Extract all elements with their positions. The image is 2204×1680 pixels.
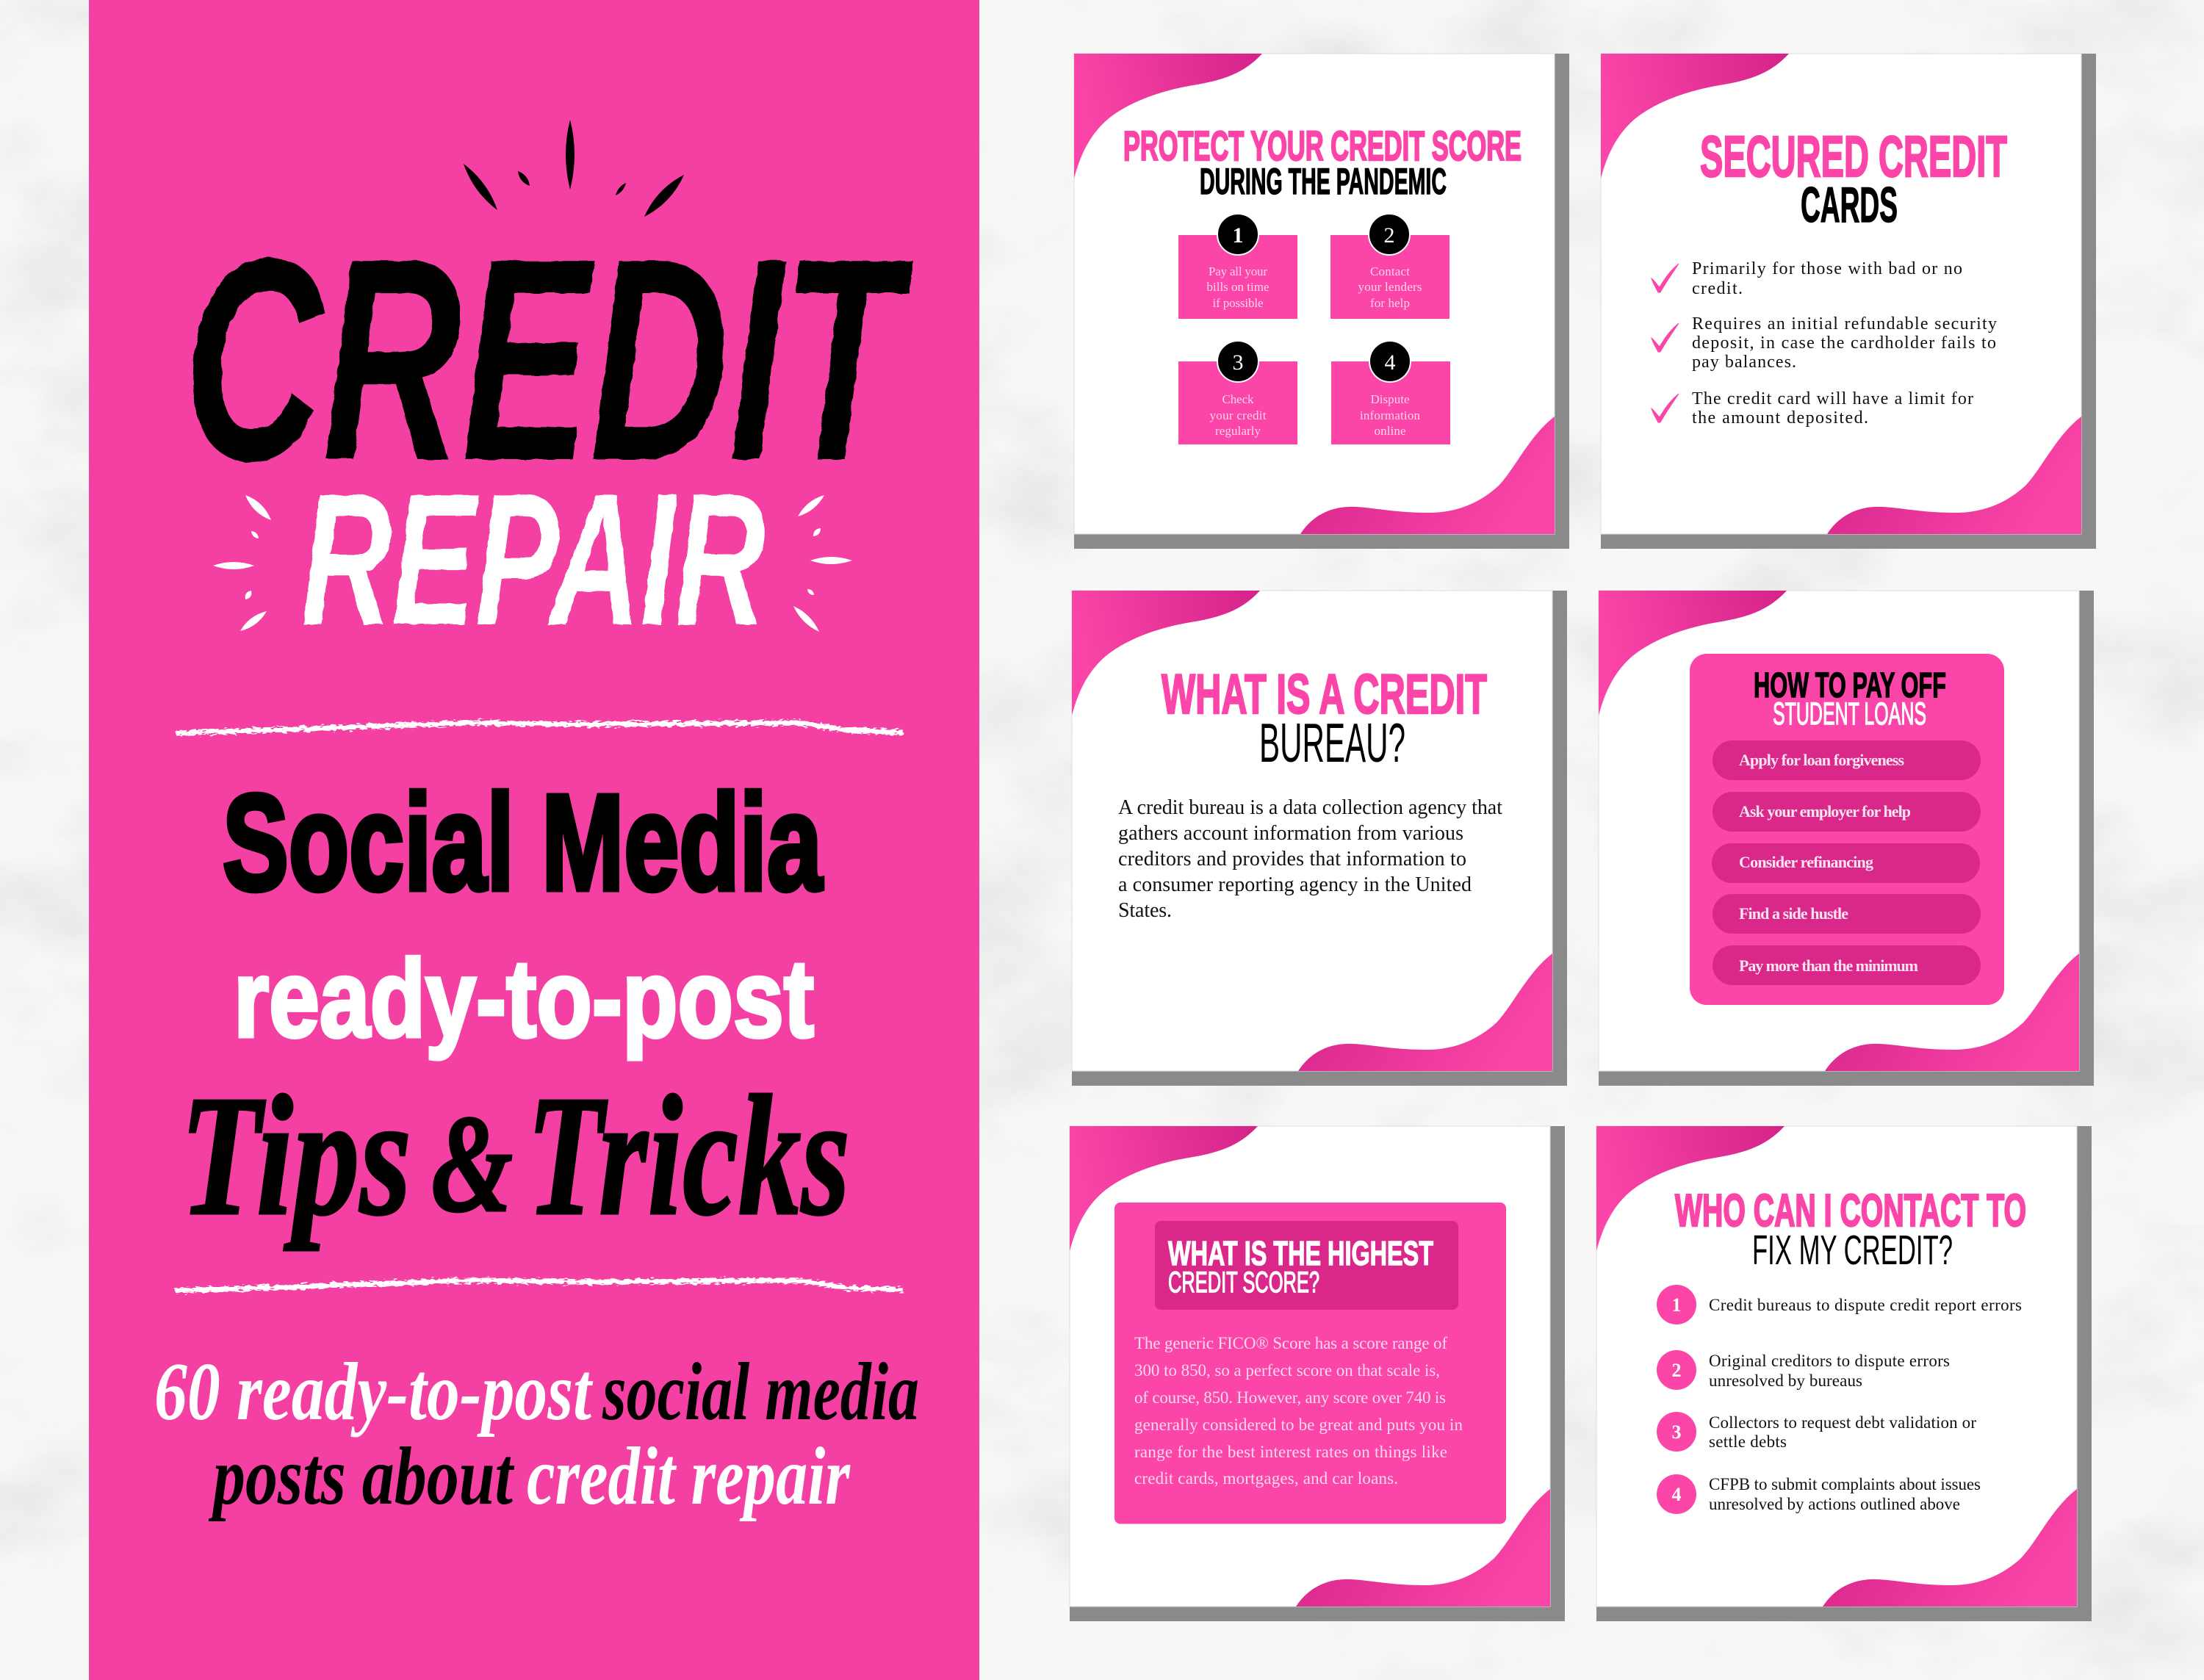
heading: FIX MY CREDIT?: [1752, 1227, 1953, 1274]
tagline: credit repair: [527, 1431, 851, 1522]
heading: [1700, 123, 2007, 233]
heading: WHAT IS A CREDIT: [1162, 663, 1487, 726]
heading: Tips & Tricks: &: [431, 1087, 513, 1241]
checklist text: [1692, 259, 1997, 428]
step 1: [1178, 214, 1297, 319]
heading: CARDS: [1801, 177, 1898, 233]
heading: [1754, 666, 1946, 732]
body text: range for the best interest rates on things like: [1134, 1443, 1447, 1461]
contact list text: CFPB to submit complaints about issues: [1709, 1475, 1981, 1493]
heading: Tips & Tricks: Tricks: [527, 1060, 850, 1251]
step 1: Pay all your: [1209, 264, 1267, 278]
panel: protect your credit score: [1074, 54, 1569, 549]
step 3: regularly: [1215, 424, 1261, 438]
pills: Consider refinancing: [1739, 853, 1873, 871]
divider: lower chalk line: [176, 1280, 903, 1291]
heading: [1162, 663, 1487, 774]
heading: BUREAU?: [1259, 712, 1405, 774]
pills: Ask your employer for help: [1739, 802, 1911, 821]
icon: white bursts beside REPAIR: [213, 495, 852, 632]
heading: [1123, 123, 1521, 202]
step 4: Dispute: [1371, 392, 1409, 406]
step 1: 1: [1233, 223, 1243, 248]
checklist text: credit.: [1692, 279, 1743, 298]
step 3: your credit: [1209, 408, 1267, 422]
heading: [1675, 1186, 2026, 1274]
contact list text: Collectors to request debt validation or: [1709, 1413, 1976, 1432]
heading: Social Media: Social Media: [223, 767, 823, 919]
body text: of course, 850. However, any score over 740 is: [1134, 1388, 1446, 1407]
step 4: [1331, 341, 1450, 444]
body text: credit cards, mortgages, and car loans.: [1134, 1469, 1398, 1488]
body text: A credit bureau is a data collection agency that: [1118, 796, 1502, 819]
contact list text: settle debts: [1709, 1432, 1787, 1451]
title: REPAIR: REPAIR: [301, 455, 766, 665]
tagline: 60 ready-to-post: [154, 1346, 593, 1438]
step 4: online: [1374, 424, 1406, 438]
heading box: WHAT IS THE HIGHEST: [1168, 1234, 1433, 1272]
pills: Find a side hustle: [1739, 904, 1848, 923]
step 4: information: [1360, 408, 1421, 422]
content box: [1114, 1203, 1506, 1524]
pills: Apply for loan forgiveness: [1739, 751, 1904, 769]
step 2: your lenders: [1358, 280, 1422, 294]
numbered badges: [1657, 1285, 1696, 1514]
body text: [1118, 796, 1502, 922]
step 1: if possible: [1212, 296, 1264, 310]
heading: DURING THE PANDEMIC: [1200, 161, 1447, 202]
pills: Pay more than the minimum: [1739, 956, 1918, 975]
checklist text: The credit card will have a limit for: [1692, 389, 1973, 408]
numbered badges: 1: [1672, 1294, 1681, 1316]
contact list text: unresolved by bureaus: [1709, 1371, 1862, 1390]
step 4: 4: [1384, 350, 1396, 375]
step 2: for help: [1370, 296, 1410, 310]
step 3: [1178, 341, 1297, 444]
tagline: social media: [602, 1346, 919, 1438]
body text: States.: [1118, 899, 1172, 922]
heading: STUDENT LOANS: [1773, 696, 1926, 732]
panel: who can I contact: [1596, 1126, 2092, 1621]
panel: highest credit score: [1070, 1126, 1565, 1621]
body text: gathers account information from various: [1118, 822, 1463, 845]
heading box: [1155, 1221, 1458, 1310]
checklist text: the amount deposited.: [1692, 408, 1868, 428]
contact list text: unresolved by actions outlined above: [1709, 1495, 1960, 1513]
heading: PROTECT YOUR CREDIT SCORE: [1123, 123, 1521, 170]
step 3: 3: [1233, 350, 1243, 375]
checklist text: Requires an initial refundable security: [1692, 314, 1997, 334]
panel: how to pay off student loans: [1599, 591, 2094, 1086]
body text: [1134, 1334, 1463, 1488]
body text: 300 to 850, so a perfect score on that scale is,: [1134, 1361, 1440, 1380]
step 2: [1330, 214, 1449, 319]
panel: left cover: [89, 0, 979, 1680]
step 2: 2: [1384, 223, 1394, 248]
body text: a consumer reporting agency in the United: [1118, 873, 1472, 896]
contact list text: [1709, 1296, 2022, 1513]
pills: [1712, 740, 1981, 985]
panel: secured credit cards: [1601, 54, 2096, 549]
numbered badges: 4: [1672, 1484, 1681, 1505]
body text: The generic FICO® Score has a score range of: [1134, 1334, 1447, 1352]
heading: SECURED CREDIT: [1700, 123, 2007, 189]
panel: what is a credit bureau: [1072, 591, 1567, 1086]
step 3: Check: [1222, 392, 1254, 406]
step 1: bills on time: [1206, 280, 1270, 294]
tagline: posts about: [209, 1431, 514, 1522]
contact list text: Credit bureaus to dispute credit report errors: [1709, 1296, 2022, 1314]
icon: check marks: [1652, 264, 1679, 422]
checklist text: deposit, in case the cardholder fails to: [1692, 334, 1996, 353]
checklist text: Primarily for those with bad or no: [1692, 259, 1962, 278]
tagline: [154, 1346, 919, 1522]
numbered badges: 3: [1672, 1421, 1681, 1443]
heading: HOW TO PAY OFF: [1754, 666, 1946, 705]
icon: black burst above title: [464, 120, 684, 217]
step 2: Contact: [1370, 264, 1410, 278]
body text: creditors and provides that information to: [1118, 848, 1466, 870]
contact list text: Original creditors to dispute errors: [1709, 1352, 1950, 1370]
title: CREDIT: CREDIT: [184, 199, 915, 521]
heading: Tips & Tricks: [180, 1060, 850, 1251]
heading: Tips & Tricks: Tips: [180, 1060, 411, 1251]
divider: upper chalk line: [176, 723, 903, 733]
heading: ready-to-post: ready-to-post: [234, 937, 814, 1060]
heading box: CREDIT SCORE?: [1168, 1266, 1319, 1299]
body text: generally considered to be great and puts you in: [1134, 1416, 1463, 1434]
numbered badges: 2: [1672, 1360, 1681, 1381]
list panel: [1690, 654, 2004, 1005]
checklist text: pay balances.: [1692, 353, 1796, 372]
